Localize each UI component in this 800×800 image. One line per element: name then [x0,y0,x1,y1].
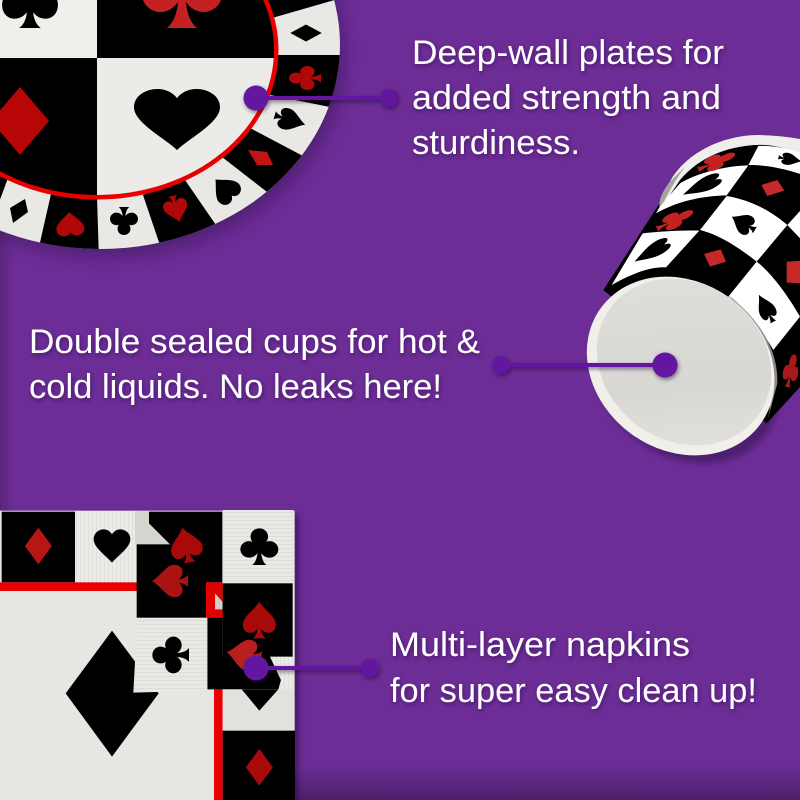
napkin red border [0,582,223,800]
text: cups: cold liquids. No leaks here! [29,368,442,406]
napkin [0,510,299,800]
cup base [551,240,800,492]
plate rim suits [10,24,322,237]
text: napkins: Multi-layer napkins [390,626,690,664]
napkin bottom-right square [223,731,295,800]
napkin folded squares [133,511,294,730]
cup [551,135,800,501]
callout connector: plate [244,86,398,110]
plate [0,0,345,260]
napkin top row [2,510,293,583]
text: plates [412,34,724,162]
cup suits [631,147,800,389]
callout connector: napkin [244,656,379,680]
text: cups [29,323,480,406]
callout connector: cup [492,352,678,378]
text: napkins: for super easy clean up! [390,672,757,710]
text: plates: sturdiness. [412,124,580,162]
text: plates: Deep-wall plates for [412,34,724,72]
text: cups: Double sealed cups for hot & [29,323,480,361]
text: plates: added strength and [412,79,721,117]
cup white checks [612,146,800,350]
napkin large diamond [66,631,159,757]
plate centre checker [0,0,274,195]
cup top rim [659,135,800,210]
text: napkins [390,626,757,710]
